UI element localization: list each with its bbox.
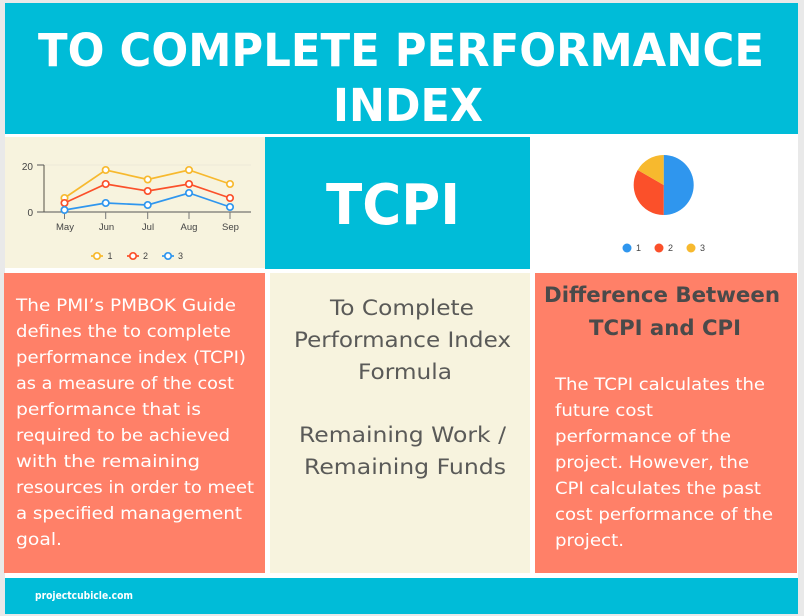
difference text: performance of the: [555, 427, 731, 447]
definition text: required to be achieved: [16, 426, 230, 446]
title: TO COMPLETE PERFORMANCE: [38, 24, 764, 77]
definition text: resources in order to meet: [16, 478, 254, 498]
formula text: Remaining Work /: [299, 423, 507, 447]
footer website: projectcubicle.com: [35, 590, 133, 602]
title: INDEX: [333, 79, 483, 132]
definition text: [15, 296, 254, 550]
difference heading: [544, 283, 780, 340]
axis labels: Jun: [99, 222, 114, 233]
title: [38, 24, 764, 132]
pie legend: 1: [636, 243, 641, 253]
axis labels: Jul: [142, 222, 154, 233]
difference text: project. However, the: [555, 453, 749, 473]
line chart legend: 3: [178, 251, 183, 261]
definition text: defines the to complete: [16, 322, 231, 342]
pie legend: 2: [668, 243, 673, 253]
difference text: project.: [555, 531, 624, 551]
panel: formula: [270, 273, 530, 573]
definition text: performance index (TCPI): [16, 348, 246, 368]
pie legend: 3: [700, 243, 705, 253]
axis labels: 20: [22, 162, 33, 173]
pie legend: [622, 243, 705, 253]
series 2: [61, 181, 233, 206]
series 1: [61, 167, 233, 201]
line chart legend: 1: [108, 251, 113, 261]
panel: difference: [535, 273, 797, 573]
axis labels: Sep: [222, 222, 239, 233]
difference text: cost performance of the: [555, 505, 773, 525]
axis labels: Aug: [181, 222, 197, 233]
panel: definition: [4, 273, 265, 573]
formula text: Remaining Funds: [304, 455, 506, 479]
formula text: To Complete: [329, 296, 474, 320]
line chart legend: 2: [143, 251, 148, 261]
panel: line chart: [5, 137, 265, 268]
pie chart: [622, 155, 705, 253]
definition text: as a measure of the cost: [16, 374, 234, 394]
definition text: The PMI’s PMBOK Guide: [15, 296, 236, 316]
formula text: [294, 296, 511, 479]
line chart legend: [91, 251, 183, 261]
panel: TCPI heading: TCPI: [326, 173, 460, 238]
definition text: a specified management: [16, 504, 242, 524]
formula text: Performance Index: [294, 328, 511, 352]
axis labels: May: [56, 222, 74, 233]
panel: TCPI heading: [265, 137, 530, 269]
definition text: performance that is: [16, 400, 201, 420]
difference text: future cost: [555, 401, 653, 421]
formula text: Formula: [358, 360, 452, 384]
difference text: The TCPI calculates the: [554, 375, 765, 395]
difference text: CPI calculates the past: [555, 479, 761, 499]
header banner: [5, 3, 798, 134]
definition text: with the remaining: [16, 452, 200, 472]
chart axes: [37, 165, 251, 219]
difference text: [554, 375, 773, 551]
definition text: goal.: [16, 530, 62, 550]
difference heading: Difference Between: [544, 283, 780, 307]
axis labels: 0: [27, 208, 33, 219]
difference heading: TCPI and CPI: [589, 316, 741, 340]
axis labels: [22, 162, 239, 233]
footer bar: [5, 578, 798, 614]
series 3: [61, 190, 233, 213]
